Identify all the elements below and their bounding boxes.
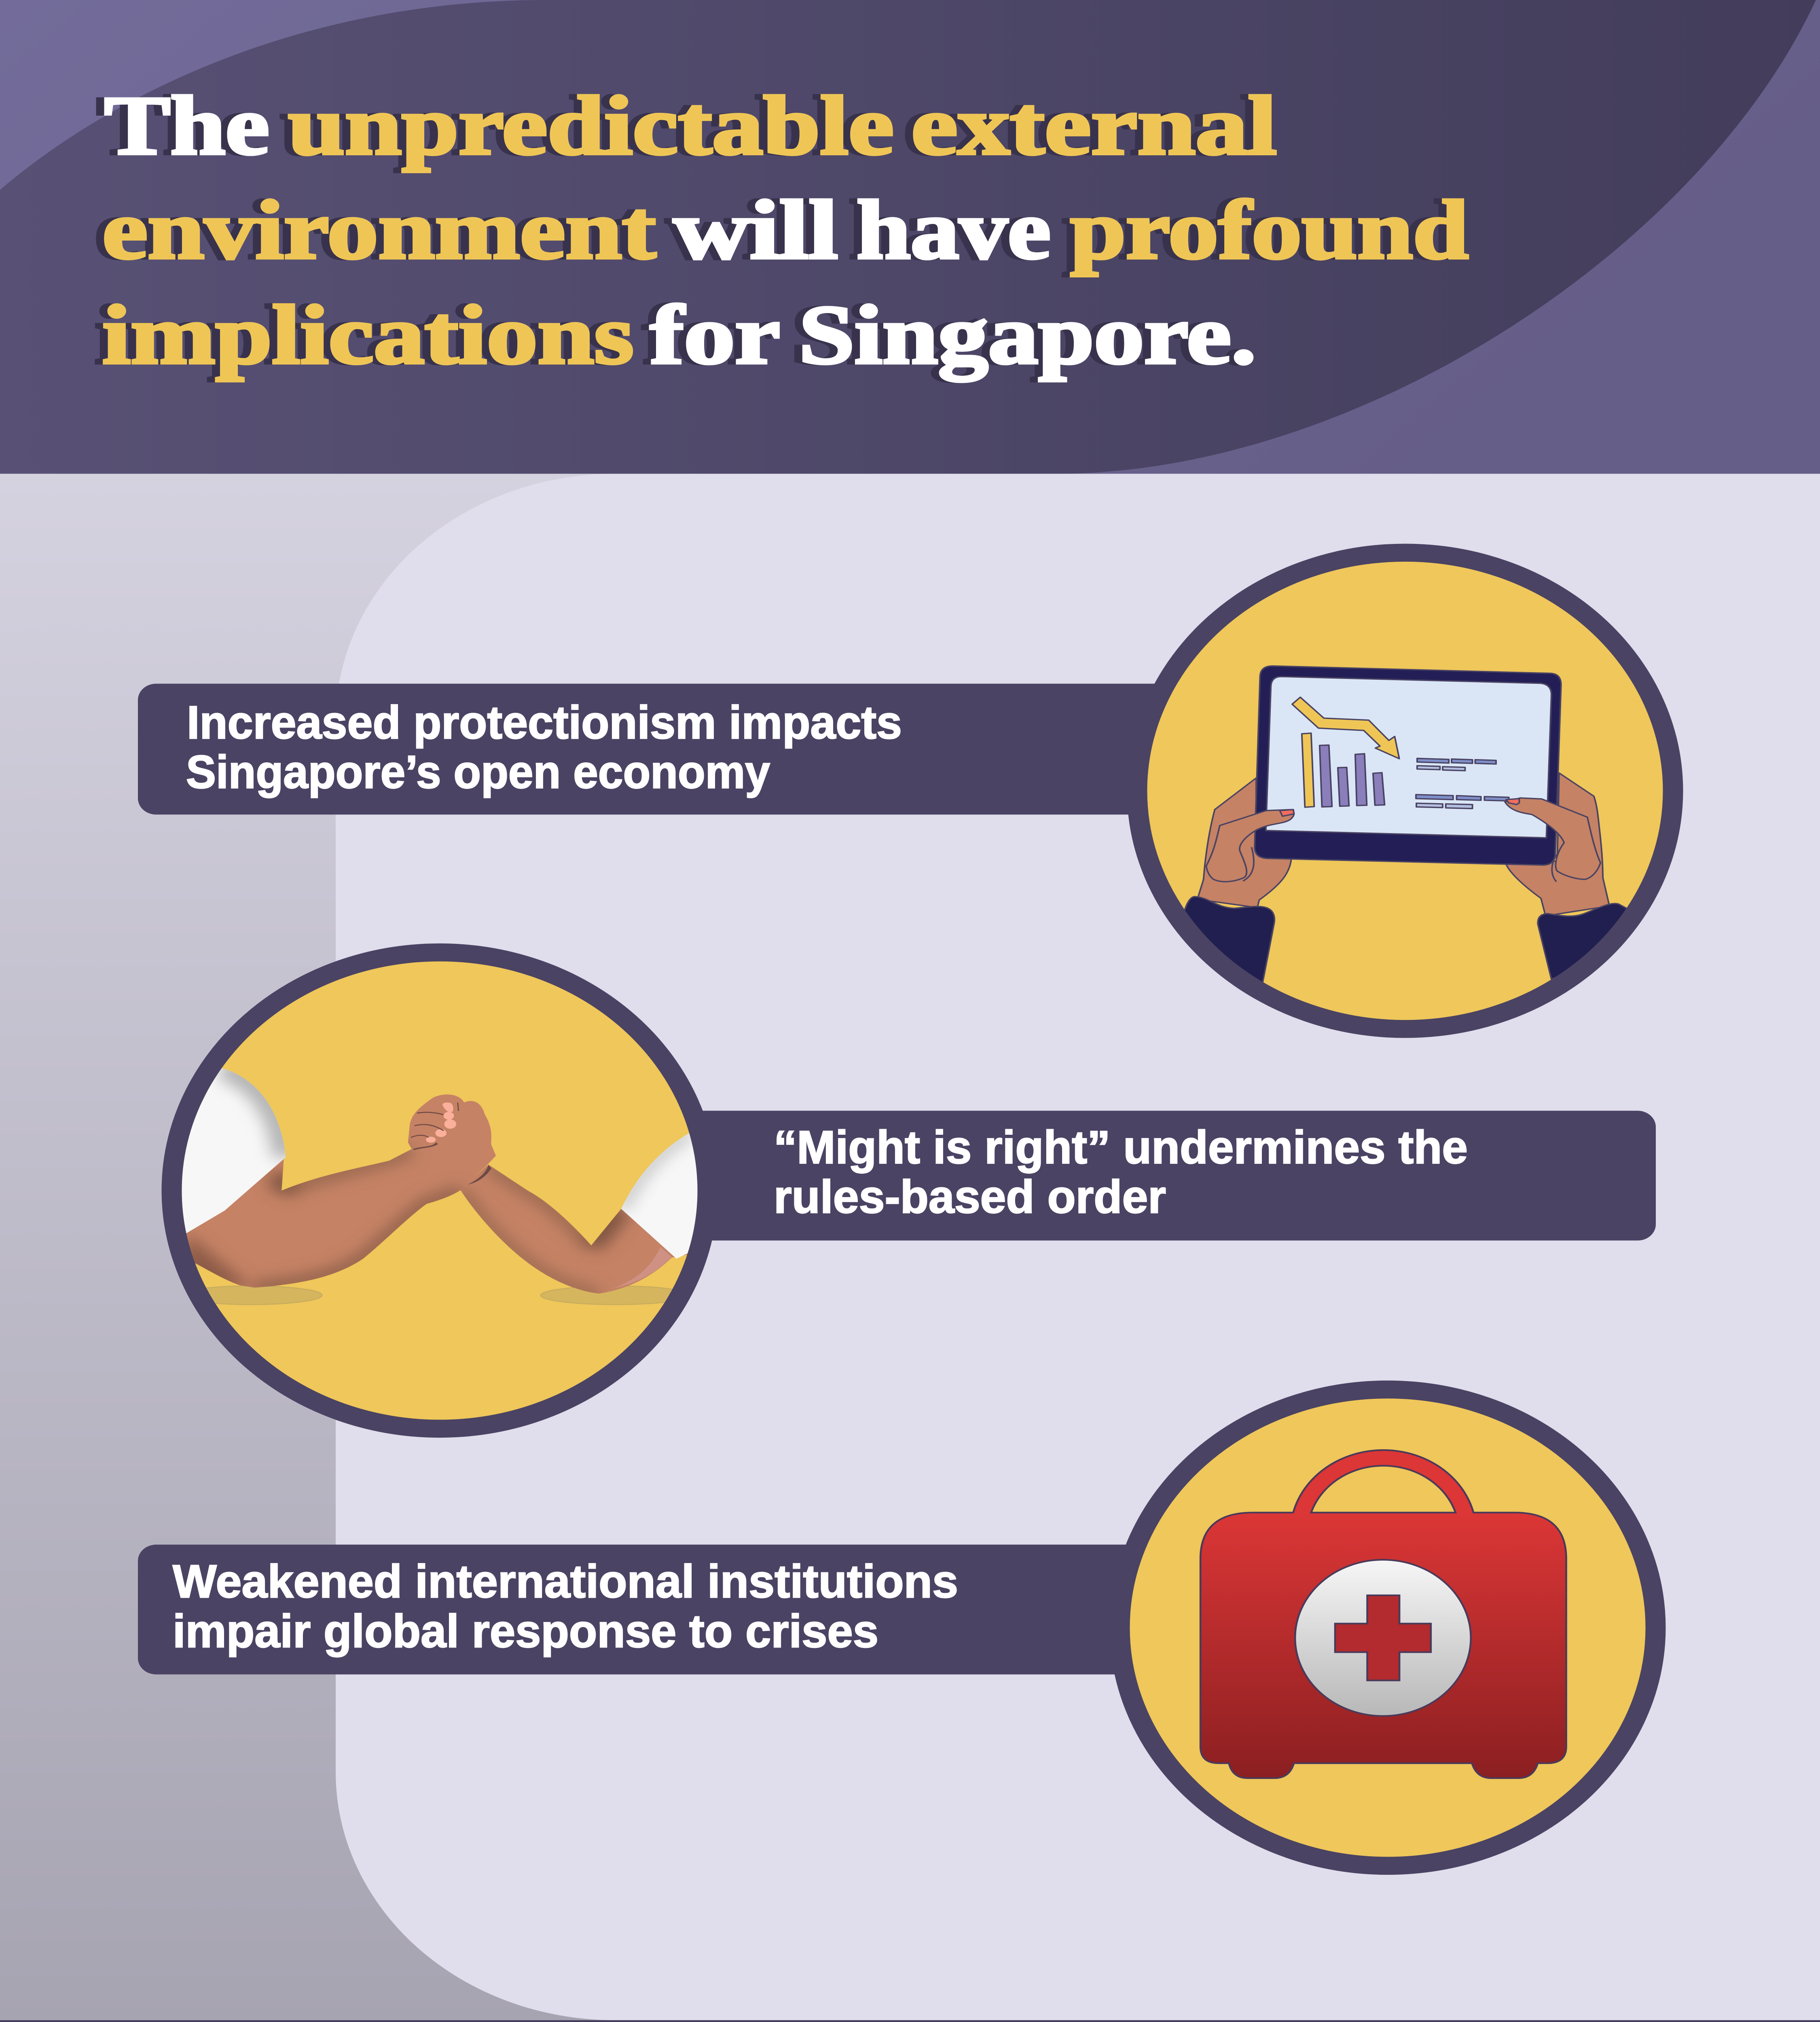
right arm — [445, 1154, 715, 1303]
label bar: protectionism — [138, 684, 1230, 814]
icon: hands holding tablet with falling chart — [1137, 553, 1673, 1029]
left hand back — [1197, 778, 1291, 907]
left sleeve — [1170, 897, 1274, 984]
white disc — [1295, 1560, 1471, 1716]
title — [102, 79, 1469, 382]
left arm with fist — [165, 1087, 502, 1294]
label bar: weakened institutions: impair global response to crises — [173, 1605, 878, 1657]
tablet body — [1255, 666, 1561, 865]
title: The — [104, 79, 269, 172]
kit case — [1200, 1450, 1566, 1778]
finger lines — [411, 1102, 459, 1138]
title: external — [911, 79, 1277, 172]
right hand back — [1506, 773, 1609, 916]
header background — [0, 0, 1820, 474]
left white sleeve — [165, 1064, 292, 1240]
bar chart — [1302, 733, 1385, 807]
title: have — [857, 183, 1051, 276]
label bar: protectionism: Singapore’s open economy — [186, 746, 770, 798]
title: will — [673, 183, 838, 276]
title: unpredictable — [288, 79, 894, 172]
label bar: protectionism: Increased protectionism impacts — [187, 696, 902, 749]
left thumb — [1206, 810, 1294, 882]
table shadows — [180, 1286, 322, 1305]
label bar: weakened institutions — [138, 1545, 1230, 1674]
icon: first aid kit — [1120, 1390, 1656, 1866]
label bar: might is right — [607, 1111, 1656, 1241]
title: implications — [102, 288, 634, 381]
knuckles — [426, 1102, 456, 1143]
tablet screen — [1266, 677, 1551, 838]
title: environment — [102, 183, 656, 276]
right sleeve — [1538, 903, 1635, 979]
panel: protectionism — [138, 553, 1673, 1029]
finger shadow — [413, 1142, 438, 1150]
right white sleeve — [618, 1127, 711, 1261]
falling arrow — [1292, 697, 1399, 759]
panel: weakened institutions — [138, 1390, 1656, 1866]
title: profound — [1070, 183, 1469, 276]
label bar: might is right: “Might is right” undermines the — [774, 1121, 1468, 1174]
text placeholders — [1416, 758, 1509, 808]
label bar: might is right: rules-based order — [774, 1171, 1166, 1223]
red cross — [1335, 1595, 1431, 1680]
title: Singapore. — [799, 288, 1256, 382]
title: for — [650, 288, 780, 381]
panel: might is right — [165, 952, 1656, 1429]
right thumb — [1505, 798, 1600, 879]
label bar: weakened institutions: Weakened international institutions — [173, 1556, 958, 1608]
body background — [0, 474, 1820, 2022]
icon: arm wrestling — [165, 952, 715, 1429]
